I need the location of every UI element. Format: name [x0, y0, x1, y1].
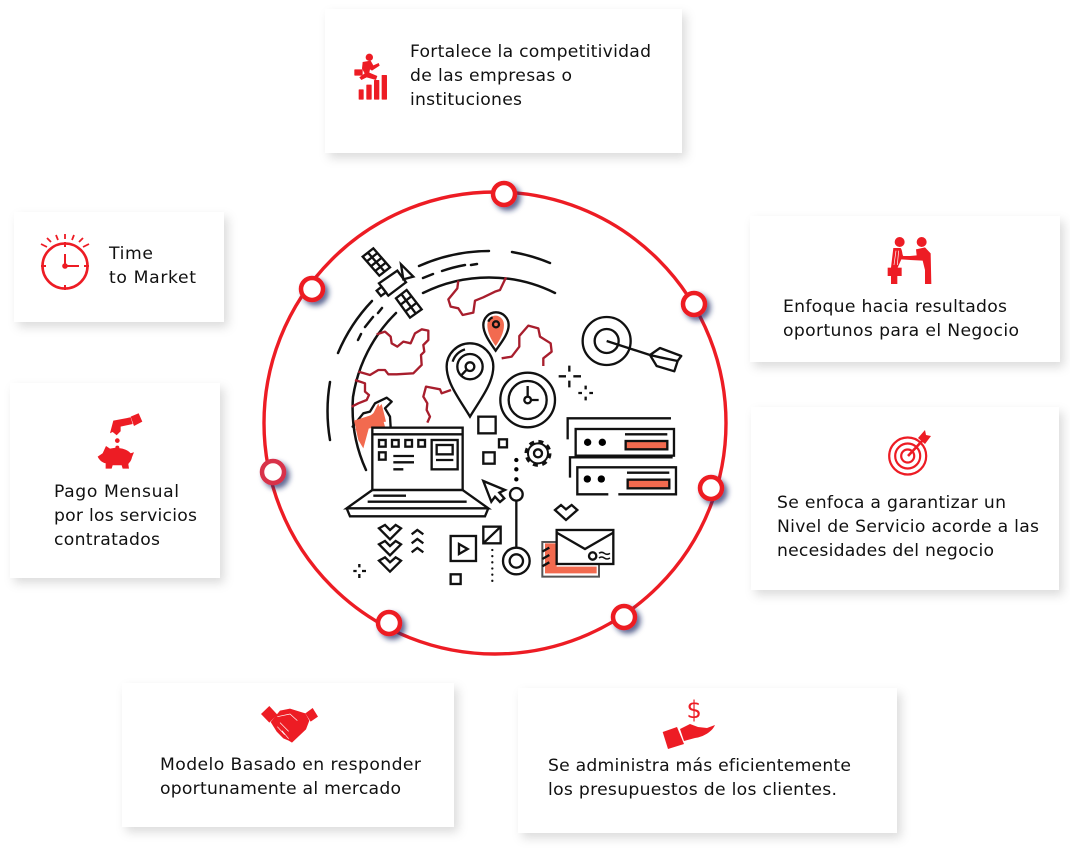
- icon: map pins: [447, 312, 509, 417]
- text: nivel de servicio: necesidades del negocio: [777, 541, 994, 561]
- text: nivel de servicio: Nivel de Servicio acorde a las: [777, 517, 1039, 537]
- arcs: [328, 251, 555, 470]
- panel: administra: [518, 688, 897, 833]
- text: pago mensual: [54, 482, 197, 550]
- panel: time to market: [14, 212, 224, 322]
- icon: hand with dollar: [663, 696, 715, 749]
- panel: enfoque: [750, 216, 1060, 362]
- text: pago mensual: Pago Mensual: [54, 482, 179, 502]
- icon: target with arrow: [889, 430, 931, 474]
- text: fortalece: [410, 42, 651, 110]
- text: administra: Se administra más eficientemente: [548, 756, 851, 776]
- text: enfoque: [783, 297, 1019, 341]
- panel: pago mensual: [10, 383, 220, 578]
- panel: fortalece: [325, 9, 682, 153]
- central illustration: [328, 248, 681, 584]
- text: administra: los presupuestos de los clientes.: [548, 780, 837, 800]
- text: administra: [548, 756, 851, 800]
- text: pago mensual: contratados: [54, 530, 160, 550]
- node: lower left: [378, 612, 400, 634]
- icon: servers, gear, envelope: [503, 418, 676, 577]
- map borders: [352, 277, 552, 430]
- text: modelo: Modelo Basado en responder: [160, 755, 422, 775]
- node: top: [493, 183, 515, 205]
- icon: laptop and squares: [347, 417, 507, 584]
- icon: piggy bank and hand: [98, 413, 142, 469]
- icon: runner on bars: [354, 54, 387, 100]
- icon: two people shaking hands: [888, 237, 931, 284]
- text: time to market: Time: [108, 244, 153, 264]
- text: fortalece: de las empresas o: [410, 66, 572, 86]
- text: fortalece: instituciones: [410, 90, 522, 110]
- icon: clock: [41, 234, 89, 290]
- icon: satellite: [363, 248, 422, 318]
- icon: handshake: [261, 706, 318, 743]
- text: fortalece: Fortalece la competitividad: [410, 42, 651, 62]
- panel: nivel de servicio: [751, 407, 1059, 590]
- text: modelo: [160, 755, 422, 799]
- icon: clock and target and sparkles: [500, 317, 681, 427]
- central ring with nodes: [262, 183, 726, 654]
- text: nivel de servicio: Se enfoca a garantizar un: [777, 493, 1006, 513]
- text: time to market: [108, 244, 196, 288]
- node: upper left: [301, 278, 323, 300]
- text: nivel de servicio: [777, 493, 1039, 561]
- icon: chevrons: [379, 525, 423, 572]
- node: left: [262, 461, 284, 483]
- panel: modelo: [122, 683, 454, 827]
- text: enfoque: Enfoque hacia resultados: [783, 297, 1007, 317]
- text: enfoque: oportunos para el Negocio: [783, 321, 1019, 341]
- text: time to market: to Market: [109, 268, 196, 288]
- node: right: [700, 477, 722, 499]
- icon: hand with dollar: $: [686, 696, 702, 724]
- text: pago mensual: por los servicios: [54, 506, 197, 526]
- node: lower right: [613, 606, 635, 628]
- icon: play box: [451, 527, 501, 584]
- text: modelo: oportunamente al mercado: [160, 779, 401, 799]
- node: upper right: [683, 293, 705, 315]
- icon: globe orange land: [354, 404, 386, 448]
